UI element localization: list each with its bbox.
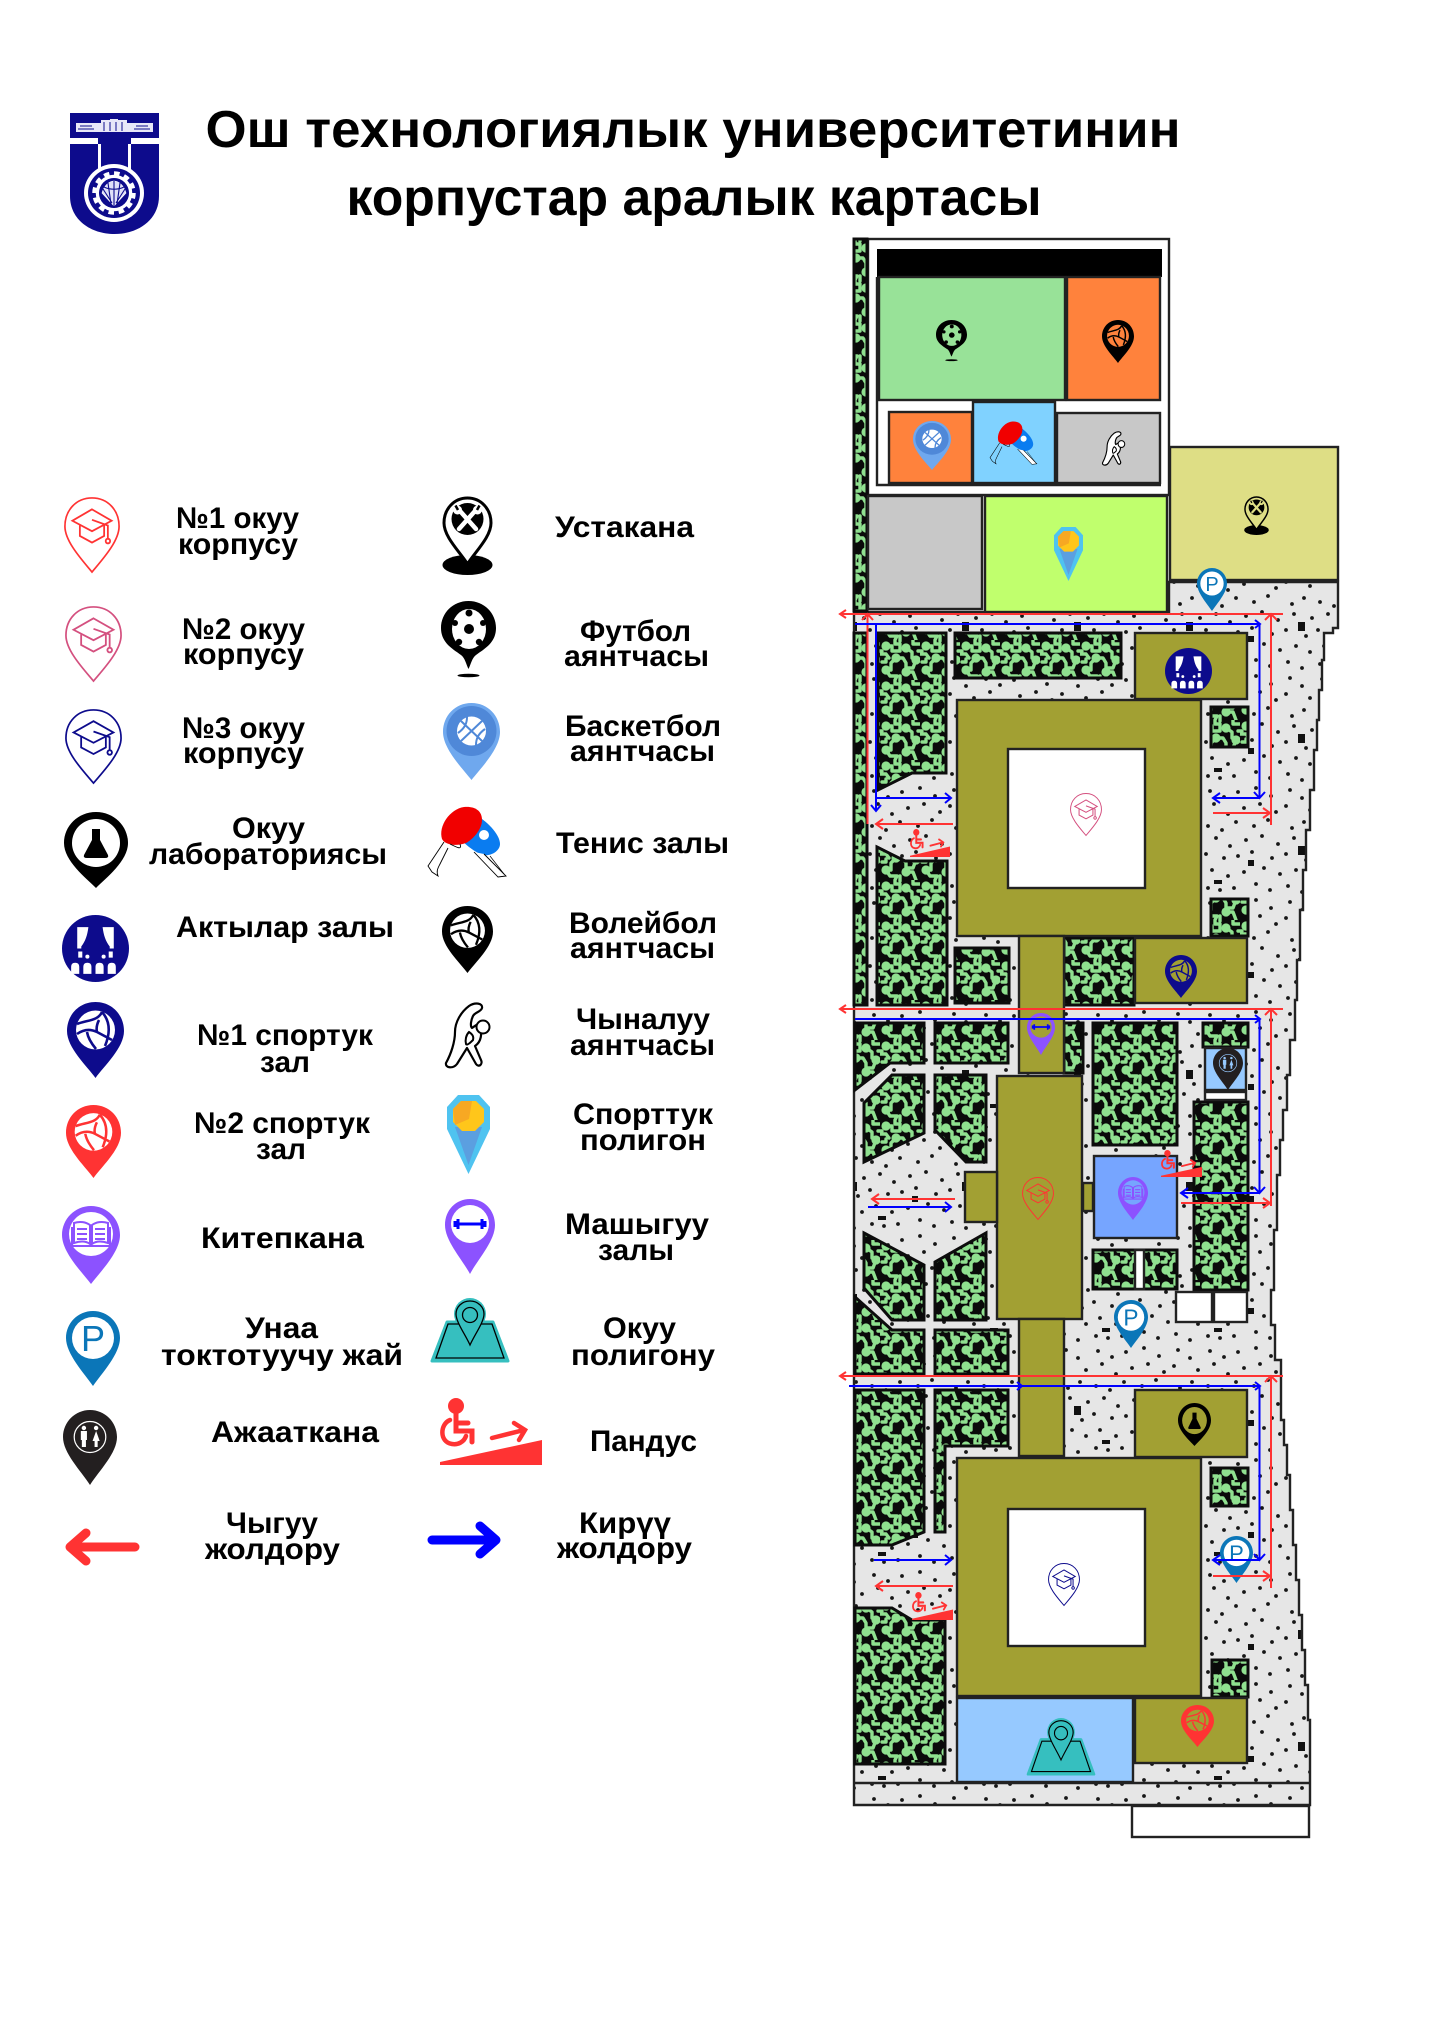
map icon: sports hall 2	[1181, 1705, 1214, 1747]
legend item: study polygon	[432, 1298, 715, 1372]
map icon: laboratory	[1178, 1403, 1211, 1446]
map icon: exercise ground	[1102, 432, 1125, 465]
legend item: football field	[441, 601, 709, 677]
legend item: parking: Унаа	[245, 1312, 318, 1345]
legend item: football field: Футбол	[580, 615, 691, 648]
legend item: laboratory: лабораториясы	[149, 838, 387, 871]
legend item: exit route: Чыгуу	[226, 1507, 318, 1540]
legend item: basketball court: Баскетбол	[565, 710, 721, 743]
map icon: building 3	[1049, 1564, 1079, 1605]
legend item: exit route: жолдору	[204, 1533, 340, 1566]
legend item: sports hall 2: №2 спортук	[194, 1107, 371, 1140]
legend item: parking: токтотуучу жай	[161, 1339, 403, 1372]
map: gravel ground	[854, 582, 1338, 1805]
legend item: tennis hall	[428, 807, 729, 877]
legend item: basketball court: аянтчасы	[570, 735, 715, 768]
legend item: assembly hall	[62, 911, 394, 982]
map icon: building 2	[1071, 794, 1101, 835]
map icon: ramp library	[1161, 1150, 1202, 1177]
legend item: exit route	[70, 1507, 340, 1566]
legend item: volleyball court: аянтчасы	[570, 932, 715, 965]
legend item: building 2: №2 окуу	[182, 613, 305, 646]
legend item: entry route: жолдору	[556, 1532, 692, 1565]
map: corner white plots	[1132, 1092, 1309, 1837]
legend item: football field: аянтчасы	[564, 640, 709, 673]
legend: left column	[62, 498, 403, 1566]
legend item: ramp	[440, 1398, 697, 1465]
legend item: building 3	[66, 710, 305, 783]
legend item: gym: Машыгуу	[565, 1208, 709, 1241]
map icon: football	[936, 320, 967, 361]
legend item: workshop	[442, 498, 694, 575]
title: Ош технологиялык университетинин	[206, 101, 1180, 159]
map icon: tennis	[990, 422, 1037, 464]
legend item: library: Китепкана	[201, 1222, 364, 1255]
map icon: gym	[1027, 1013, 1055, 1055]
map icon: library	[1118, 1177, 1148, 1220]
legend item: ramp: Пандус	[590, 1425, 697, 1458]
legend item: laboratory	[64, 812, 387, 888]
legend item: entry route	[432, 1507, 692, 1565]
logo: university shield	[70, 113, 159, 234]
legend item: restroom	[63, 1410, 379, 1485]
legend item: workshop: Устакана	[555, 511, 694, 544]
legend item: exercise ground: аянтчасы	[570, 1029, 715, 1062]
map: exit routes	[840, 610, 1283, 1591]
legend item: entry route: Кирүү	[579, 1507, 671, 1540]
legend item: building 3: корпусу	[183, 737, 304, 770]
legend item: tennis hall: Тенис залы	[556, 827, 729, 860]
legend item: sports hall 2	[66, 1105, 371, 1178]
legend item: building 3: №3 окуу	[182, 712, 305, 745]
legend item: sports hall 1: №1 спортук	[197, 1019, 374, 1052]
map icon: study polygon	[1028, 1718, 1094, 1774]
legend item: building 1: корпусу	[178, 528, 298, 561]
title: корпустар аралык картасы	[346, 169, 1042, 227]
legend item: volleyball court	[442, 906, 717, 973]
legend item: building 1	[65, 498, 299, 572]
map: building 2	[957, 633, 1247, 1073]
map: hedges	[854, 633, 1248, 1764]
map: entry routes	[849, 620, 1265, 1565]
map icon: sports polygon	[1054, 527, 1083, 581]
legend item: volleyball court: Волейбол	[569, 907, 717, 940]
legend item: sports hall 2: зал	[256, 1133, 306, 1166]
legend: right column	[428, 498, 729, 1565]
title	[206, 101, 1180, 227]
map icon: building 1	[1023, 1178, 1053, 1219]
legend item: basketball court	[443, 703, 721, 780]
legend item: gym: залы	[598, 1234, 674, 1267]
map icon: ramp building 3	[912, 1592, 953, 1620]
legend item: sports hall 1: зал	[260, 1046, 310, 1079]
map icon: volleyball	[1102, 320, 1134, 363]
map icon: assembly hall	[1165, 648, 1212, 694]
legend item: gym	[445, 1199, 709, 1274]
map: building 1	[965, 1048, 1246, 1456]
map icon: workshop	[1244, 497, 1269, 535]
map icon: parking middle	[1114, 1300, 1148, 1348]
map icon: sports hall 1	[1165, 955, 1197, 998]
legend item: library	[62, 1206, 364, 1284]
legend item: assembly hall: Актылар залы	[176, 911, 394, 944]
legend item: study polygon: Окуу	[603, 1312, 676, 1345]
legend item: sports polygon: полигон	[580, 1124, 706, 1157]
legend item: parking	[66, 1311, 403, 1386]
legend item: building 2: корпусу	[183, 638, 304, 671]
map icon: parking lower	[1220, 1536, 1253, 1583]
legend item: sports polygon	[447, 1095, 714, 1174]
map icon: basketball	[913, 421, 951, 470]
map: sports complex top	[854, 239, 1338, 612]
map: building 3	[854, 1390, 1310, 1783]
map icon: restroom	[1213, 1048, 1243, 1090]
legend item: building 2	[66, 607, 305, 681]
legend item: study polygon: полигону	[571, 1339, 715, 1372]
map icon: parking top	[1197, 568, 1227, 611]
legend item: sports polygon: Спорттук	[573, 1098, 714, 1131]
legend item: sports hall 1	[67, 1002, 374, 1079]
legend item: building 1: №1 окуу	[176, 502, 299, 535]
map icon: ramp building 2	[910, 829, 950, 857]
legend item: exercise ground	[446, 1003, 715, 1067]
legend item: restroom: Ажааткана	[211, 1416, 379, 1449]
legend item: exercise ground: Чыналуу	[576, 1003, 710, 1036]
legend item: laboratory: Окуу	[232, 812, 305, 845]
campus map	[840, 239, 1338, 1837]
